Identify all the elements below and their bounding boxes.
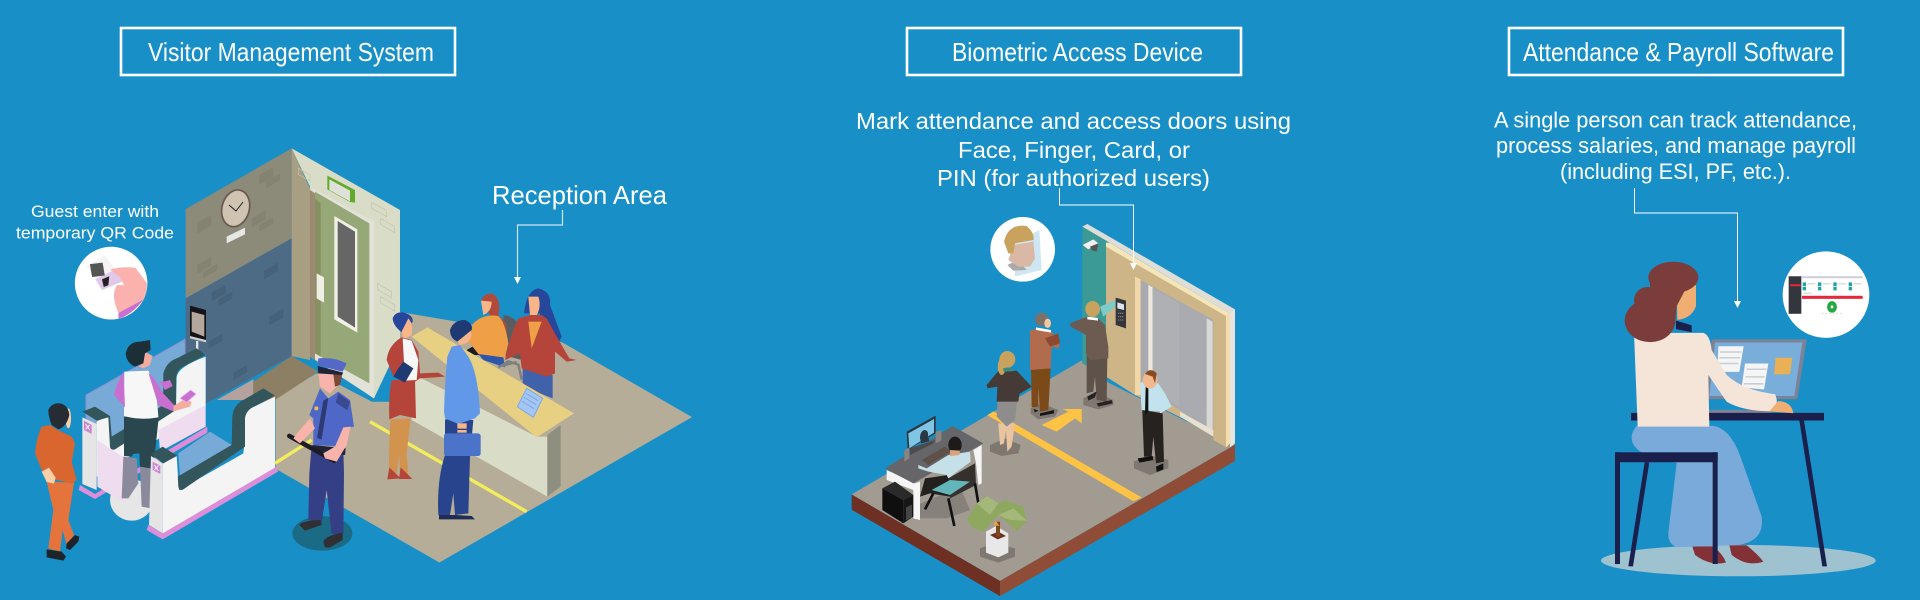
arrow: reception area connector: [514, 210, 562, 284]
icon: QR code bubble: [75, 247, 147, 320]
text: biometric description: PIN (for authorized users): [937, 165, 1210, 191]
panel: payroll software scene: [1601, 251, 1876, 576]
callout: reception area: Reception Area: [492, 180, 668, 210]
icon: potted plant: [967, 496, 1027, 563]
wall: right with door: [292, 148, 400, 398]
desk: [1631, 413, 1827, 566]
yellow floor line: [370, 422, 527, 512]
glass side panel: [86, 339, 185, 440]
panel: entrance wall and door: [186, 148, 400, 403]
icon: software screenshot bubble: [1783, 251, 1869, 338]
callout: temporary QR code: [16, 202, 174, 242]
heading: Biometric Access Device: Biometric Access Device: [952, 37, 1203, 67]
heading: Attendance and Payroll Software: Attendance & Payroll Software: [1523, 37, 1834, 67]
figure: seated woman at desk: [1625, 262, 1793, 563]
panel: reception floor: [276, 312, 692, 562]
text: payroll description: [1494, 108, 1857, 184]
panel: office desk and plant: [882, 416, 1027, 563]
figure: man in blue shirt with briefcase: [438, 320, 481, 519]
turnstile: front wing: [147, 388, 278, 539]
heading: Visitor Management System: Visitor Management System: [148, 37, 434, 67]
text: biometric description: Mark attendance and access doors using: [856, 108, 1291, 134]
icon: wall clock: [218, 187, 254, 243]
figure: woman in red suit: [387, 312, 445, 479]
reception desk: [412, 327, 574, 497]
figure: standing receptionist: [505, 288, 577, 398]
figure: man in orange suit: [35, 403, 79, 561]
laptop: [1707, 339, 1807, 413]
device: face terminal: [190, 306, 206, 356]
desk and computer: [882, 416, 983, 523]
turnstile: back wing: [79, 348, 207, 499]
wall: left: [186, 148, 318, 403]
heading: Visitor Management System: [121, 28, 455, 75]
figure: security guard: [289, 358, 354, 551]
turnstile floor disc: [110, 479, 153, 521]
stool: [1615, 452, 1718, 566]
floor shadow: [913, 487, 970, 518]
figure: man in brown jacket: [1030, 313, 1060, 419]
arrow: payroll connector: [1634, 188, 1741, 308]
callout: temporary QR code: temporary QR Code: [16, 224, 174, 242]
arrow: biometric connector: [1060, 188, 1137, 270]
figure: visitor with card: [114, 340, 196, 508]
panel: reception desk and people: [370, 288, 577, 519]
device: access terminal with scan beam: [1100, 298, 1126, 328]
yellow arrow: [1042, 409, 1082, 432]
sliding glass door: [1135, 277, 1213, 437]
floor: [276, 312, 692, 562]
text: biometric description: Face, Finger, Card, or: [958, 137, 1190, 163]
heading: Attendance and Payroll Software: [1509, 28, 1843, 75]
figure: seated receptionist: [467, 294, 522, 380]
panel: biometric floor platform: [852, 360, 1235, 596]
figure: man scanning face: [1070, 301, 1113, 409]
text: payroll description: (including ESI, PF, etc.).: [1560, 159, 1791, 184]
yellow line segment: [275, 440, 312, 463]
icon: security camera: [1083, 239, 1098, 252]
figure: woman in dark jacket: [987, 351, 1032, 456]
yellow floor line: [987, 411, 1142, 501]
callout: temporary QR code: Guest enter with: [31, 202, 159, 221]
figure: security officer: [1134, 370, 1172, 475]
text: payroll description: process salaries, and manage payroll: [1496, 133, 1856, 158]
figure: seated operator and chair: [918, 437, 978, 526]
back wall: [1082, 224, 1235, 447]
text: payroll description: A single person can track attendance,: [1494, 108, 1857, 132]
turnstile and figures at the gate: [35, 339, 354, 561]
icon: face scan bubble: [990, 217, 1055, 282]
ground shadow: [1601, 545, 1876, 576]
pink glass gate: [97, 440, 125, 503]
text: biometric description: [856, 108, 1291, 191]
heading: Biometric Access Device: [907, 28, 1241, 75]
panel: entrance wall and people: [987, 217, 1235, 475]
